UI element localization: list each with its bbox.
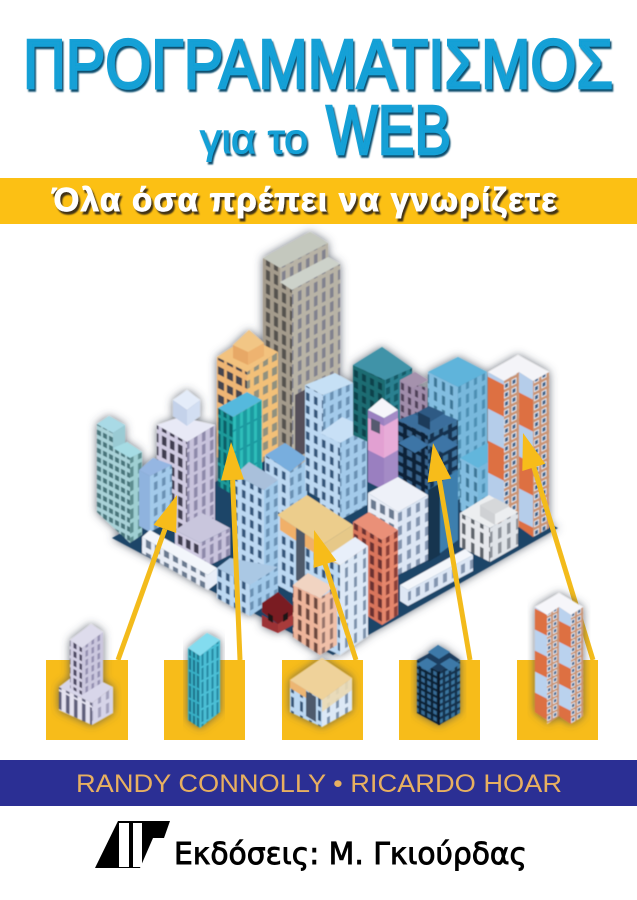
arrow: navy tower — [428, 443, 470, 660]
arrow: striped tower — [522, 433, 593, 660]
city base platform — [112, 420, 558, 655]
publisher name: Εκδόσεις: Μ. Γκιούρδας — [174, 837, 527, 872]
author band — [0, 760, 637, 806]
yellow box 2 — [164, 660, 245, 740]
building: pale blue and white front block — [307, 537, 368, 655]
arrow: teal tower — [221, 442, 244, 660]
title: WEB: WEB — [326, 91, 451, 169]
author names: RANDY CONNOLLY • RICARDO HOAR — [76, 770, 562, 798]
arrow: tan roof block — [314, 530, 356, 660]
building: pink and white tower — [368, 398, 398, 490]
thumbnail: tan roof block — [290, 658, 352, 727]
building: light blue stepped tower — [305, 373, 367, 520]
publisher logo — [95, 821, 170, 868]
isometric city illustration — [97, 232, 558, 655]
building: dark teal tower — [353, 347, 412, 450]
building: small red house — [262, 592, 293, 633]
building: blue grey tall block — [217, 462, 278, 616]
building: tan roof block — [277, 495, 353, 610]
building: large sky blue tower — [428, 357, 503, 520]
arrow: lavender tower — [118, 495, 177, 660]
yellow box 1 — [46, 660, 128, 740]
thumbnail: cyan tower — [188, 633, 220, 728]
thumbnail: lavender tower — [59, 624, 113, 725]
building: grey skyscraper — [263, 232, 340, 480]
building: small blue block — [139, 458, 172, 532]
subtitle band — [0, 178, 637, 224]
thumbnail: navy tower — [417, 645, 460, 725]
title: second line, για το: για το — [200, 115, 308, 162]
building: white block — [368, 477, 428, 575]
thumbnail: striped tower — [535, 593, 583, 724]
building: salmon tower — [353, 512, 398, 625]
building: blue low block — [265, 443, 307, 520]
yellow box 4 — [399, 660, 480, 740]
building: teal tower — [218, 392, 262, 495]
building: long low white block, left — [142, 530, 217, 590]
yellow box 3 — [282, 660, 363, 740]
building: striped orange and white tower — [488, 355, 549, 537]
yellow box 5 — [517, 660, 598, 740]
building: long low white block, right — [400, 549, 473, 606]
building: peach front block — [293, 573, 337, 655]
building: lavender stepped tower — [157, 390, 230, 570]
building: pale teal tower — [97, 416, 142, 543]
building: orange tower — [217, 330, 278, 472]
subtitle text: Όλα όσα πρέπει να γνωρίζετε — [51, 181, 557, 218]
building: grey white low block — [460, 495, 518, 562]
building: dark navy tower — [398, 406, 458, 562]
building: mauve block — [400, 372, 428, 440]
